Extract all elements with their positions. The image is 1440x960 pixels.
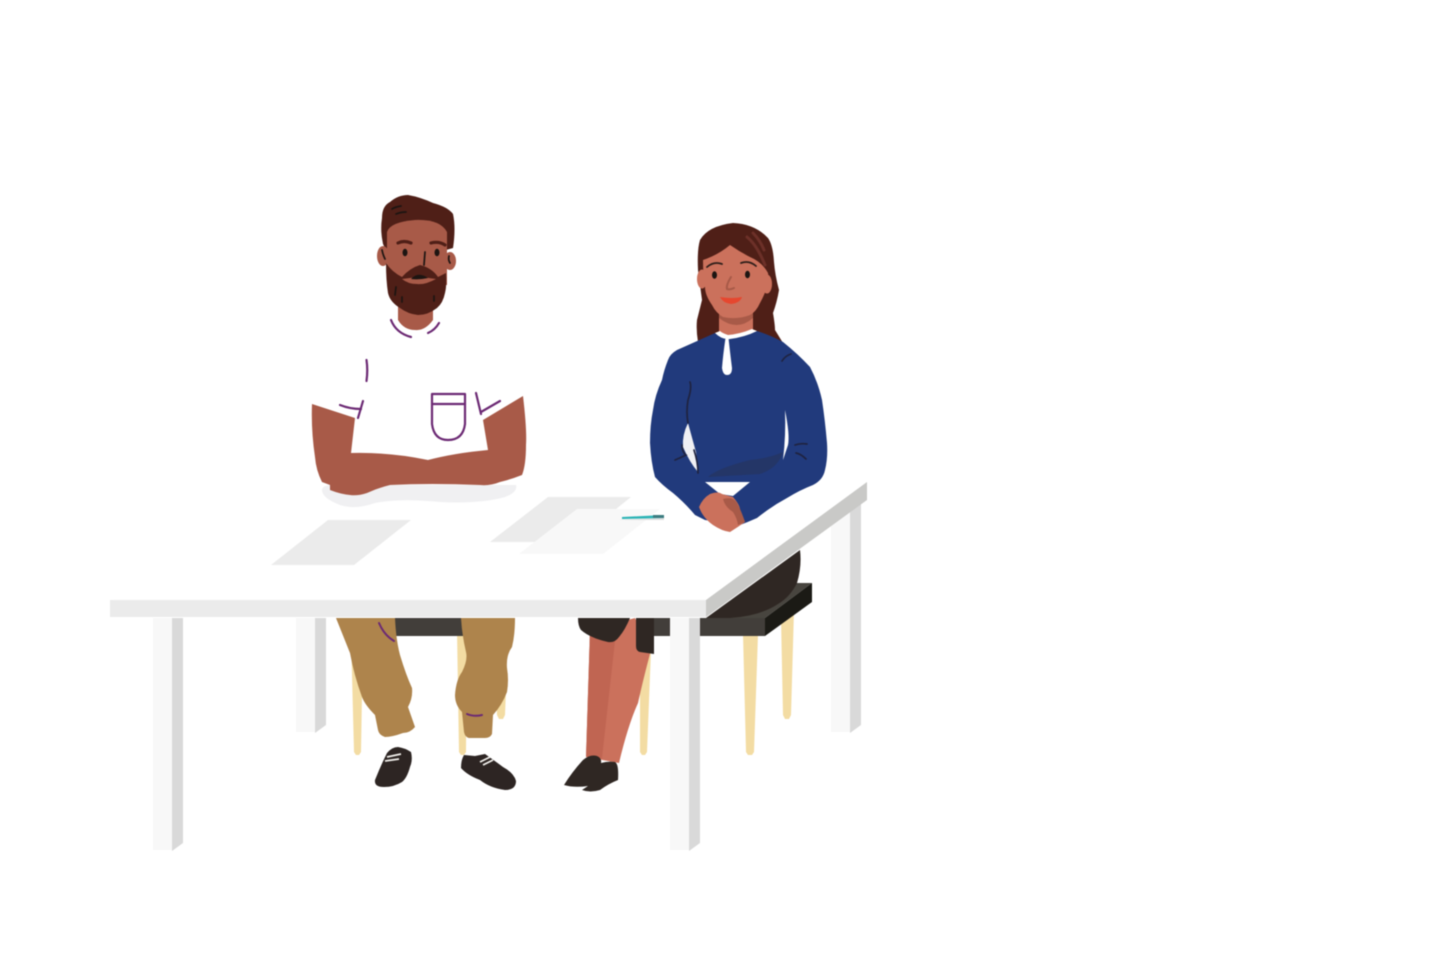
man — [312, 195, 526, 495]
paper on table front — [519, 509, 660, 554]
blouse gap under arm right — [783, 410, 789, 460]
blouse gap under arm left — [683, 423, 698, 472]
arm shadow on table — [322, 485, 516, 507]
neck shadow — [719, 308, 753, 325]
man left shoe — [375, 747, 412, 787]
sweater shadow — [708, 452, 783, 477]
man trousers — [336, 618, 515, 738]
table back legs — [296, 500, 861, 733]
hair highlight — [747, 233, 765, 265]
nose, beard and hair details — [382, 206, 450, 302]
shirt pocket — [432, 394, 465, 440]
woman — [650, 223, 827, 532]
paper on table back — [490, 497, 631, 542]
trouser right leg — [455, 618, 515, 738]
table front right leg — [670, 618, 700, 851]
trouser left leg — [336, 618, 415, 737]
woman shoes — [564, 756, 618, 792]
chair legs — [351, 610, 794, 755]
woman face — [703, 245, 768, 318]
mouth — [402, 278, 436, 284]
neck — [398, 300, 433, 330]
eyebrows — [398, 242, 445, 245]
table front left leg — [153, 618, 183, 851]
sweater crease lines — [675, 354, 807, 473]
hair — [381, 195, 454, 250]
sweater — [650, 331, 827, 525]
arms — [312, 396, 526, 495]
table top — [110, 482, 867, 600]
shirt collar and sleeve lines — [340, 320, 500, 440]
woman eyes — [712, 271, 750, 279]
face — [387, 220, 447, 285]
blouse at waist — [705, 482, 750, 496]
pen — [618, 515, 664, 520]
man right shoe — [461, 754, 516, 790]
table side edge — [706, 482, 867, 617]
woman neck — [719, 305, 753, 338]
paper on table left — [271, 520, 411, 565]
table front edge — [110, 600, 706, 617]
trouser crease marks — [379, 623, 482, 716]
ears — [377, 246, 456, 270]
chair seat — [395, 583, 812, 636]
woman mouth — [720, 297, 742, 304]
woman ears — [697, 270, 772, 294]
woman hair back — [697, 223, 783, 345]
woman legs — [586, 618, 651, 763]
blouse collar and tie — [715, 329, 757, 375]
table — [110, 482, 867, 851]
eyes — [402, 249, 440, 256]
woman skirt seated on chair — [706, 550, 801, 618]
woman eyebrows — [707, 262, 756, 267]
woman skirt front — [578, 618, 654, 654]
woman nose — [727, 277, 734, 289]
beard — [386, 263, 446, 315]
hands — [699, 492, 745, 532]
